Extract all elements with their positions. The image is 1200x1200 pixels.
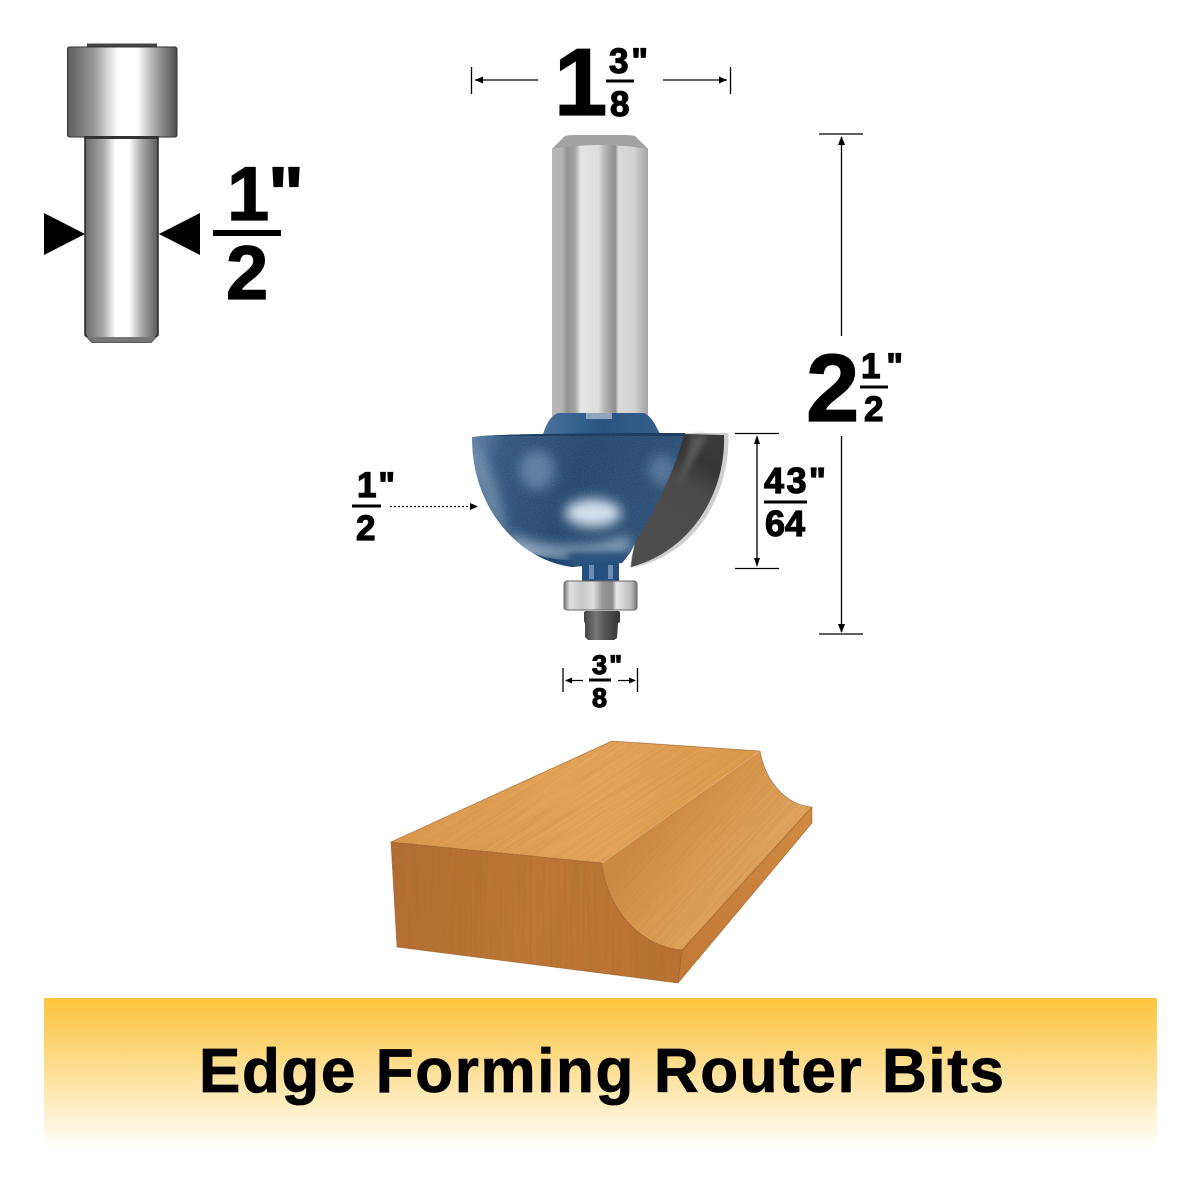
height value [806, 335, 903, 442]
radius value: 1" [357, 466, 395, 505]
height value: 2 [806, 335, 859, 442]
carbide cutter [630, 433, 729, 568]
bearing value [589, 650, 622, 713]
bit neck [543, 413, 660, 434]
shank size fraction: 1" [227, 152, 304, 237]
bearing stem [582, 562, 619, 582]
bit shank [552, 135, 648, 420]
router bit [465, 135, 729, 640]
wood edges [391, 741, 812, 983]
bearing [564, 581, 637, 610]
band background [44, 998, 1157, 1150]
cutting height arrows [735, 434, 779, 568]
overall height dimension [806, 134, 903, 634]
cutting height value: 43" [764, 460, 826, 501]
icon: collet cap [68, 44, 177, 137]
shank diameter diagram [44, 44, 304, 342]
wood cove face [602, 751, 812, 950]
bearing diameter dimension [563, 650, 638, 713]
dimension arrow: left [472, 67, 538, 94]
bearing value: 8 [592, 683, 607, 713]
wood lower step [678, 807, 812, 983]
height value: 1" [861, 347, 903, 386]
icon: right pointer arrow [159, 213, 200, 255]
width value: 1 [554, 29, 607, 136]
title: Edge Forming Router Bits [199, 1037, 1004, 1106]
height arrows [819, 134, 863, 634]
icon: shank cylinder [84, 136, 159, 342]
width value [554, 29, 648, 136]
title band [44, 998, 1157, 1150]
icon: left pointer arrow [44, 213, 85, 255]
wood top face [392, 741, 760, 863]
shank size fraction: 2 [226, 231, 268, 316]
wood profile sample [390, 740, 812, 984]
dimension arrow: right [663, 67, 730, 94]
bearing arrows [563, 668, 638, 692]
wood front face [391, 842, 682, 983]
cutting height value: 64 [765, 503, 805, 544]
bearing value: 3" [592, 650, 622, 680]
radius value: 2 [356, 509, 375, 548]
width value: 3" [609, 42, 648, 81]
width dimension [472, 29, 730, 136]
radius dotted arrow [390, 503, 478, 510]
radius dimension [352, 466, 478, 548]
cutting height value [764, 460, 826, 544]
radius value [352, 466, 395, 548]
cutting body [472, 433, 685, 567]
cutting height dimension [735, 434, 826, 568]
width value: 8 [610, 85, 629, 124]
height value: 2 [864, 390, 883, 429]
shank size fraction [213, 152, 304, 316]
retaining screw [584, 611, 620, 640]
